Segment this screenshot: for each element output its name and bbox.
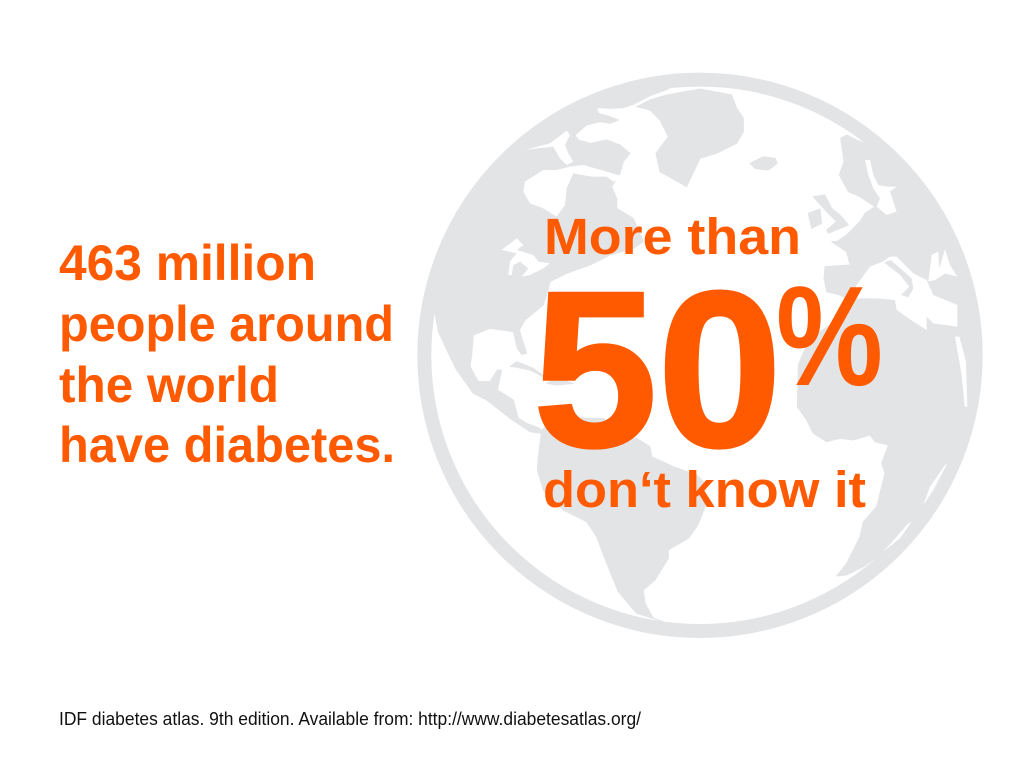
Africa east sliver lower <box>883 522 912 552</box>
Arctic channel <box>525 131 573 165</box>
South America <box>537 415 705 622</box>
Greenland <box>637 89 743 187</box>
Africa east sliver upper <box>923 463 947 505</box>
North America <box>430 80 668 433</box>
Great Lakes <box>502 238 550 277</box>
Ireland <box>808 209 822 228</box>
Hudson Bay and strait <box>523 165 623 217</box>
percent sign: % <box>776 257 883 416</box>
Iceland <box>750 157 777 170</box>
Cuba <box>510 362 547 378</box>
globe ring <box>424 80 976 631</box>
Italy <box>884 260 913 297</box>
left statement: people around <box>59 296 394 352</box>
headline: don't know it: don‘t know it <box>543 461 866 518</box>
Hispaniola <box>547 378 573 385</box>
seas and lakes <box>502 131 967 552</box>
left statement: have diabetes. <box>59 417 395 473</box>
globe illustration <box>424 80 977 631</box>
big number 50: 50 <box>533 246 782 494</box>
source citation: IDF diabetes atlas. 9th edition. Available from: http://www.diabetesatlas.org/ <box>59 709 641 729</box>
headline: more than: More than <box>544 208 801 265</box>
left statement: 463 million <box>59 235 316 291</box>
Great Britain <box>813 195 848 233</box>
left statement <box>59 235 395 473</box>
continents <box>430 80 977 622</box>
left statement: the world <box>59 357 279 413</box>
Red Sea <box>955 337 967 407</box>
Black Sea <box>928 249 957 282</box>
Eurasia and Africa <box>797 135 977 576</box>
Mediterranean Sea <box>848 257 957 330</box>
Baltic Sea <box>865 160 897 215</box>
